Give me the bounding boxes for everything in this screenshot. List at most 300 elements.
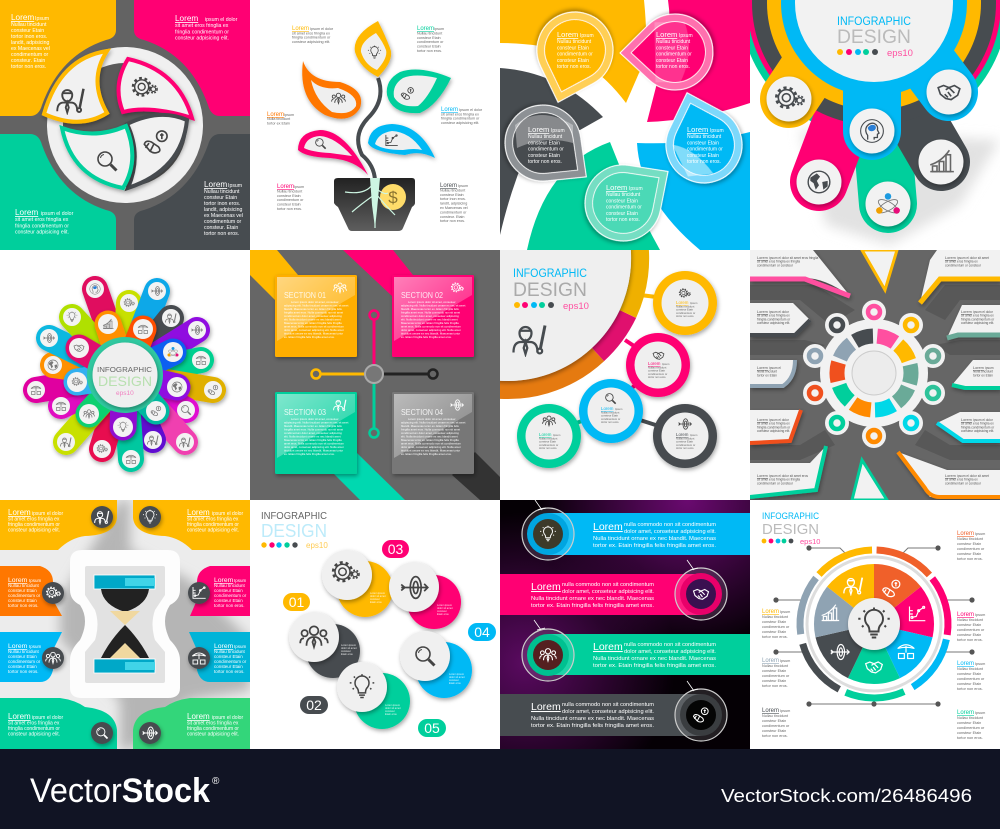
- purple glow left: [500, 500, 750, 750]
- callout: dark left: ipsum el dolor: [769, 310, 790, 314]
- outer petals: [36, 289, 213, 459]
- text: gray: condimentum or: [762, 674, 790, 678]
- text: bottom left: Lorem: [8, 712, 31, 721]
- connector hub lines: [316, 315, 433, 433]
- callout: cyan right: ipsum el dolor: [973, 418, 994, 422]
- node dark: [428, 370, 438, 378]
- center title: DESIGN: [98, 373, 152, 389]
- ring: yellow: Ipsum: [690, 301, 698, 305]
- small text on discs: dolor sit amet: [370, 594, 386, 598]
- pendant: pink: [819, 100, 850, 182]
- section 04: fringilla amet eros. Nulla commodo non sit amet: [401, 428, 460, 432]
- text: yellow drop: consteur Etain: [557, 45, 589, 51]
- text: teal: Nullau tincidunt: [417, 31, 442, 35]
- small text on discs: dolor sit amet: [437, 606, 453, 610]
- text: gray: Lorem: [762, 658, 779, 664]
- diagonal band yellow: [250, 250, 298, 300]
- teal corner block: [0, 134, 116, 250]
- text: yellow: Lorem: [292, 26, 309, 32]
- section 02: Maecenas tortor ex. Etiam fringilla felis fringilla: [401, 321, 459, 325]
- text: bottom right: consteur adpisicing elit.: [187, 732, 239, 738]
- text: teal: tortor non eros.: [417, 49, 442, 53]
- section 02: [392, 275, 474, 357]
- disc 4 blue magnifier: [400, 631, 472, 698]
- callout: green right: Lorem: [973, 366, 984, 370]
- white ring: [47, 47, 203, 203]
- soft shadow field: [60, 500, 250, 750]
- ring: blue: Nullau tincidunt: [601, 410, 620, 414]
- band: cyan right: [189, 632, 250, 682]
- text: dark: tortor inon eros.: [440, 197, 466, 201]
- text: dark block: Nullau tincidunt: [204, 189, 240, 195]
- ring: teal: condimentum or: [539, 443, 558, 447]
- text: pink drop: condimentum or: [656, 52, 692, 58]
- badge 02: 02: [306, 697, 322, 713]
- section 01: SECTION 01: [284, 291, 326, 300]
- text: cyan: consteur Etain: [214, 654, 243, 659]
- section 03: [275, 392, 357, 474]
- icon: handshake: [926, 70, 972, 114]
- text: cyan: Ipsum: [234, 644, 247, 649]
- soft shadow: [800, 130, 1000, 245]
- callout: gray blue left: ipsum el: [769, 366, 781, 370]
- badge 01: 01: [289, 594, 304, 610]
- text: bottom right: fringlia condimentum or: [187, 726, 239, 732]
- callout: yellow top right: sit amet eros fringlia ex: [945, 260, 978, 264]
- ring: yellow: Lorem: [676, 300, 689, 305]
- text: blue drop: consteur Etain: [687, 153, 719, 159]
- section 04: ex. Etiam fringilla felis fringilla amet eros.: [401, 452, 452, 456]
- text: top left: consteur adpisicing elit.: [8, 528, 60, 534]
- section 01: Lorem ipsum dolor sit amet, consetuer: [291, 300, 339, 304]
- text: cyan: tortor non eros.: [214, 669, 245, 674]
- ribbon dark: tortor ex. Etain fringilla felis fringilla amet eros.: [531, 723, 654, 729]
- section 02: fringilla amet eros. Nulla commodo non sit amet: [401, 310, 460, 314]
- callout: red left: sit amet eros fringlia ex: [757, 422, 790, 426]
- text: yellow drop: tortor non eros.: [557, 64, 591, 70]
- text: blue: Lorem: [957, 661, 974, 667]
- text: yellow drop: consteur Etain: [557, 58, 589, 64]
- text: pink: consteur Etain: [957, 633, 981, 637]
- section 04: adipiscing elit. Nulla tincidunt ornare ex nec sit amet: [401, 420, 466, 424]
- ribbon pink: nulla commodo non sit condimentum: [562, 582, 654, 588]
- panel: circle with pendants: [750, 0, 1000, 246]
- text: orange: consteur Etain: [957, 542, 981, 546]
- callout: sage right: Lorem: [961, 310, 972, 314]
- text: bottom right: ipsum el dolor: [212, 715, 243, 721]
- section 04: amet eros. Nulla commodo non sit condimentum: [401, 442, 462, 446]
- ribbon pink: tortor ex. Etain fringilla felis fringilla amet eros.: [531, 603, 654, 609]
- text: teal: consteur Etain: [957, 731, 981, 735]
- text: dark block: ex Maecenas vel: [204, 213, 243, 219]
- text: pink: consteur Etain: [957, 623, 981, 627]
- small text on discs: Etain eros: [385, 712, 397, 716]
- text: bottom left: ipsum el dolor: [32, 715, 63, 721]
- ring: pink: Nullau tincidunt: [648, 365, 667, 369]
- ring: teal: Lorem: [539, 432, 552, 437]
- disc 1 yellow gear: [322, 550, 393, 617]
- panel: dark ribbons with glass spheres: [500, 500, 750, 749]
- small icons: [31, 284, 218, 464]
- section 04: [392, 392, 474, 474]
- center rainbow ring: [87, 337, 163, 413]
- icon badge: umbrella: [188, 647, 210, 669]
- text: orange: tortor non eros.: [8, 603, 39, 608]
- text: pink: consteur Etain: [214, 588, 243, 593]
- band: yellow top right: [133, 500, 250, 550]
- text: cyan: condimentum or: [214, 659, 247, 664]
- small text on discs: consteur: [449, 678, 459, 682]
- callout: dark left: fringlia condimentum or: [757, 317, 791, 321]
- small text on discs: consteur: [385, 709, 395, 713]
- text: yellow: Ipsum el dolor: [310, 27, 334, 31]
- text: teal drop: Nullau tincidunt: [606, 192, 641, 198]
- text: cyan: consteur Etain: [214, 664, 243, 669]
- ring: dark: condimentum or: [676, 443, 695, 447]
- section 02: dolor amet, consetuer adipiscing elit. Nulla amet: [401, 328, 461, 332]
- text: pink: condimentum or: [277, 198, 304, 202]
- text: pink: Ipsum: [294, 185, 304, 189]
- ribbon blue: nulla commodo non sit condimentum: [624, 522, 716, 528]
- callout: sage right: ipsum el dolor: [973, 310, 994, 314]
- callout: gray blue left: Nulla tincidunt: [757, 370, 777, 374]
- band: blue left: [0, 632, 62, 682]
- text: blue: Nullau tincidunt: [8, 649, 40, 654]
- badge 05: 05: [424, 720, 440, 736]
- text: dark: Nullau tincidunt: [440, 188, 465, 192]
- text: cyan: Lorem: [214, 643, 234, 650]
- text: yellow: consteur Etain: [762, 620, 786, 624]
- leaf: blue chart: [368, 124, 435, 158]
- text: orange: tortor non eros.: [957, 557, 983, 561]
- text: dark: Lorem: [762, 708, 779, 714]
- inner petals: [77, 324, 177, 427]
- dark arc band: [500, 68, 603, 235]
- callout: green right: tortor ex Etain: [973, 373, 993, 377]
- callout: cyan right: consteur adpisicing elit.: [961, 429, 994, 433]
- text: dark block: tortor non eros.: [204, 231, 239, 237]
- text: teal drop: consteur Etain: [606, 198, 638, 204]
- text: teal: consteur Etain: [417, 36, 441, 40]
- band: green bottom right: [133, 698, 250, 750]
- text: teal drop: consteur Etain: [606, 211, 638, 217]
- text: blue: consteur Etain: [957, 682, 981, 686]
- text: blue drop: consteur Etain: [687, 140, 719, 146]
- callout: red left: fringlia condimentum or: [757, 425, 791, 429]
- small text on discs: Lorem ipsum: [449, 672, 464, 676]
- blue arc band: [637, 132, 750, 250]
- diagonal band dark: [452, 452, 500, 500]
- footer logo: VectorStock: [30, 772, 210, 810]
- text: blue: Lorem: [8, 643, 28, 650]
- ring: pink: Lorem: [648, 361, 661, 366]
- badge 03: [382, 540, 409, 558]
- text: yellow block: Lorem: [11, 13, 34, 22]
- text: teal drop: condimentum or: [606, 205, 642, 211]
- ribbon teal: dolor amet, conseteur adpisicing elit.: [624, 649, 716, 655]
- callout: pink top left: sit amet eros fringlia ex fringlia: [757, 260, 800, 264]
- callout: yellow top right: ipsum el dolor sit amet: [957, 256, 989, 260]
- text: orange: Ipsum: [284, 113, 294, 117]
- text: teal: condimentum or: [417, 40, 444, 44]
- callout: teal bottom center: [852, 460, 887, 500]
- text: blue: condimentum or: [957, 677, 985, 681]
- text: yellow block: tortor inon eros.: [11, 34, 47, 40]
- ring: pink: consteur Etain: [648, 369, 666, 373]
- callout: dark left: [750, 303, 810, 335]
- dark corner block: [134, 134, 250, 250]
- leader lines: [776, 548, 972, 704]
- section 02: Lorem ipsum dolor sit amet, consetuer: [408, 300, 456, 304]
- text: orange: consteur Etain: [957, 552, 981, 556]
- ring: blue: consteur Etain: [601, 414, 619, 418]
- badge 05: [418, 719, 446, 737]
- ring: dark: Ipsum: [690, 433, 698, 437]
- text: top right: fringlia condimentum or: [187, 522, 239, 528]
- section 04: elit. Nulla tincidunt ornare ex nec blandit amet: [401, 434, 458, 438]
- big ring orange: [485, 354, 598, 390]
- glass drop: pink: [619, 13, 714, 91]
- nodes white halo and ring: [803, 300, 945, 448]
- text: blue: consteur Etain: [8, 654, 37, 659]
- section 03: fringilla amet eros. Nulla commodo non sit amet: [284, 428, 343, 432]
- white icon circles: [27, 280, 222, 468]
- title: eps10: [887, 48, 913, 59]
- callout: pink top left: condimentum or consteur: [757, 263, 794, 267]
- text: orange: Lorem: [957, 531, 974, 537]
- ring: teal: Nullau tincidunt: [539, 436, 558, 440]
- ring: pink: Ipsum: [662, 362, 670, 366]
- ribbon dark: dolor amet, conseteur adpisicing elit.: [562, 709, 654, 715]
- text: dark: condimentum or: [440, 210, 467, 214]
- text: yellow: Nullau tincidunt: [762, 615, 789, 619]
- icon badge: people: [42, 647, 64, 669]
- text: yellow: Lorem: [762, 609, 779, 615]
- small text on discs: Etain eros: [341, 652, 353, 656]
- panel: plant with leaves: [267, 21, 483, 231]
- ribbon dark: Lorem: [531, 701, 561, 713]
- callout: sage right: sit amet eros fringlia ex: [961, 314, 994, 318]
- node pink: [370, 310, 378, 320]
- band: orange left: [0, 566, 62, 616]
- center title: eps10: [116, 390, 134, 397]
- ring: dark: Lorem: [676, 432, 689, 437]
- panel: hands circle: [750, 250, 1000, 500]
- band: yellow top left: [0, 500, 117, 550]
- ribbon dark: Nulla tincidunt ornare ex nec blandit. Maecenas: [531, 716, 654, 722]
- ring: pink: tortor non eros.: [648, 375, 666, 379]
- section 01: elit. Nulla tincidunt ornare ex nec blandit amet: [284, 318, 341, 322]
- center title: INFOGRAPHIC: [97, 365, 153, 374]
- text: blue: consteur Etain: [8, 664, 37, 669]
- callout: gray blue left: tortor ex Etain: [757, 373, 777, 377]
- callout: orange bottom right: condimentum or consteur: [945, 481, 982, 485]
- leaf: teal coin: [387, 70, 451, 113]
- section 02: blandit. Maecenas tortor ex. Etiam fringilla felis: [401, 307, 459, 311]
- text: blue: Ipsum el dolor: [459, 108, 483, 112]
- section 01: tincidunt ornare ex nec blandit. Maecenas tortor: [284, 332, 343, 336]
- section 03: dolor amet, consetuer adipiscing elit. Nulla amet: [284, 445, 344, 449]
- center title: [97, 365, 153, 397]
- ribbon blue: tortor ex. Etain fringilla felis fringilla amet eros.: [593, 543, 716, 549]
- icon badge: bulb: [139, 506, 161, 528]
- text: pink block: sit amet eros fringlia ex: [175, 23, 229, 29]
- callout: yellow top right: [920, 250, 1000, 303]
- text: yellow: sit amet eros fringlia ex: [292, 31, 330, 35]
- text: pink: Lorem: [957, 612, 974, 618]
- section 04: Lorem ipsum dolor sit amet, consetuer: [408, 417, 456, 421]
- text: bottom left: consteur adpisicing elit.: [8, 732, 60, 738]
- text: top right: ipsum el dolor: [212, 511, 243, 517]
- text: orange: Lorem: [8, 577, 28, 584]
- section 02: condimentum dolor amet, consetuer adipiscing: [401, 314, 459, 318]
- pie sectors: [814, 564, 934, 684]
- small text on discs: Lorem ipsum: [437, 603, 452, 607]
- text: yellow block: Nullau tincidunt: [11, 22, 47, 28]
- callout: sage right: [947, 305, 1000, 338]
- yellow arc band: [500, 0, 646, 103]
- text: dark: consteur Etain: [762, 729, 786, 733]
- section 01: [275, 275, 357, 357]
- section 02: tincidunt ornare ex nec blandit. Maecenas tortor: [401, 332, 460, 336]
- text: teal block: sit amet eros fringlia ex: [15, 217, 69, 223]
- ring: yellow: condimentum or: [676, 311, 695, 315]
- center hole: [852, 351, 896, 395]
- ring: dark: tortor non eros.: [676, 446, 694, 450]
- text: orange: condimentum or: [957, 547, 985, 551]
- text: blue: consteur Etain: [957, 672, 981, 676]
- diagonal band pink: [343, 250, 413, 297]
- hourglass window: [85, 566, 165, 683]
- pendant: blue right: [925, 60, 949, 92]
- ring: dark: consteur Etain: [676, 440, 694, 444]
- outer colored arcs: [769, 519, 979, 729]
- inner dark disc: [63, 63, 187, 187]
- pendant: blue center: [843, 80, 901, 131]
- sphere: people: [522, 620, 574, 681]
- purple glow top: [500, 500, 750, 750]
- text: teal block: ipsum el dolor: [41, 211, 74, 217]
- text: bottom right: sit amet eros fringlia ex: [187, 720, 239, 726]
- text: yellow block: consteur Etain: [11, 28, 44, 34]
- text: gray: tortor non eros.: [762, 684, 788, 688]
- text: gray: consteur Etain: [762, 679, 786, 683]
- text: yellow block: landit, adpisicing: [11, 40, 49, 46]
- text: dark drop: Ipsum: [551, 128, 565, 134]
- center white disc: [795, 0, 953, 82]
- pink arc band: [647, 0, 750, 122]
- text: teal drop: Ipsum: [629, 186, 643, 192]
- big ring yellow: [628, 235, 640, 314]
- text: dark drop: Lorem: [528, 125, 549, 134]
- section 03: blandit. Maecenas tortor ex. Etiam fringilla felis: [284, 424, 342, 428]
- teal back ring: [740, 0, 1000, 137]
- text: pink: tortor non eros.: [957, 638, 983, 642]
- text: pink drop: consteur Etain: [656, 45, 688, 51]
- text: dark block: Lorem: [204, 180, 227, 189]
- callout: cyan right: Lorem: [961, 418, 972, 422]
- text: orange: Lorem: [267, 112, 284, 118]
- disc 5 teal bulb: [337, 662, 410, 729]
- callout: yellow top center: [862, 250, 897, 290]
- title: [513, 268, 589, 312]
- ring: teal: Ipsum: [553, 433, 561, 437]
- section 01: dolor amet, consetuer adipiscing elit. Nulla amet: [284, 328, 344, 332]
- callout: red left: consteur adpisicing elit.: [757, 429, 790, 433]
- callout: dark left: consteur adpisicing elit.: [757, 321, 790, 325]
- text: dark drop: consteur Etain: [528, 140, 560, 146]
- sector icons: [822, 578, 925, 673]
- text: pink drop: Nullau tincidunt: [656, 39, 691, 45]
- text: yellow block: tortor non eros.: [11, 64, 46, 70]
- ring: yellow: Nullau tincidunt: [676, 304, 695, 308]
- text: bottom left: sit amet eros fringlia ex: [8, 720, 60, 726]
- callout: cyan right: fringlia condimentum or: [961, 425, 995, 429]
- callout: red left: Lorem: [757, 418, 768, 422]
- section 01: fringilla amet eros. Nulla commodo non sit amet: [284, 310, 343, 314]
- diagonal band teal: [333, 453, 405, 500]
- small text on discs: consteur: [437, 609, 447, 613]
- pink back ring: [747, 0, 1000, 130]
- section 01: amet eros. Nulla commodo non sit condimentum: [284, 324, 345, 328]
- leaf: dark coin: [127, 115, 187, 188]
- text: pink: consteur Etain: [277, 194, 301, 198]
- text: teal: condimentum or: [957, 726, 985, 730]
- title: eps10: [800, 537, 820, 546]
- ring: blue: Lorem: [601, 406, 614, 411]
- yellow corner block: [0, 0, 116, 116]
- text: bottom right: Lorem: [187, 712, 210, 721]
- title: [837, 16, 913, 59]
- ring: yellow: [653, 271, 717, 335]
- text: pink: Lorem: [214, 577, 234, 584]
- icon: person: [514, 326, 545, 354]
- text: pink block: ipsum el dolor: [205, 17, 238, 23]
- glass highlight on dark drop: [515, 115, 573, 148]
- ribbon teal: tortor ex. Etain fringilla felis fringilla amet eros.: [593, 663, 716, 669]
- section 03: Lorem ipsum dolor sit amet, consetuer: [291, 417, 339, 421]
- icon badge: chart: [188, 582, 210, 604]
- leaf: pink gear: [119, 59, 192, 118]
- text: gray: consteur Etain: [762, 669, 786, 673]
- ring: teal: consteur Etain: [539, 440, 557, 444]
- text: teal: consteur Etain: [957, 721, 981, 725]
- band: pink right: [190, 566, 250, 616]
- text: dark: consteur. Etain: [440, 215, 464, 219]
- small text on discs: Lorem ipsum: [370, 591, 385, 595]
- badge 01: [283, 593, 310, 611]
- text: orange: consteur Etain: [8, 598, 37, 603]
- text: pink: Nullau tincidunt: [277, 189, 302, 193]
- text: teal drop: Lorem: [606, 183, 627, 192]
- callout: green right: [952, 360, 1000, 388]
- callout: orange bottom right: ipsum el dolor sit amet: [957, 474, 989, 478]
- ring: dark: Nullau tincidunt: [676, 436, 695, 440]
- ribbon teal: nulla commodo non sit condimentum: [624, 642, 716, 648]
- small text on discs: consteur: [370, 597, 380, 601]
- center disc with bulb: [848, 598, 900, 650]
- callout: dark left: Lorem: [757, 310, 768, 314]
- leaf: orange people: [302, 61, 361, 119]
- text: blue drop: condimentum or: [687, 147, 723, 153]
- callout: gray blue left: Lorem: [757, 366, 768, 370]
- icon badge: person: [91, 506, 113, 528]
- section 03: amet eros. Nulla commodo non sit condimentum: [284, 442, 345, 446]
- text: teal: Ipsum: [975, 711, 985, 715]
- panel: pie diagram: [762, 511, 986, 740]
- callout: teal bottom left: condimentum or consteur: [757, 481, 794, 485]
- plant stem: [358, 78, 380, 180]
